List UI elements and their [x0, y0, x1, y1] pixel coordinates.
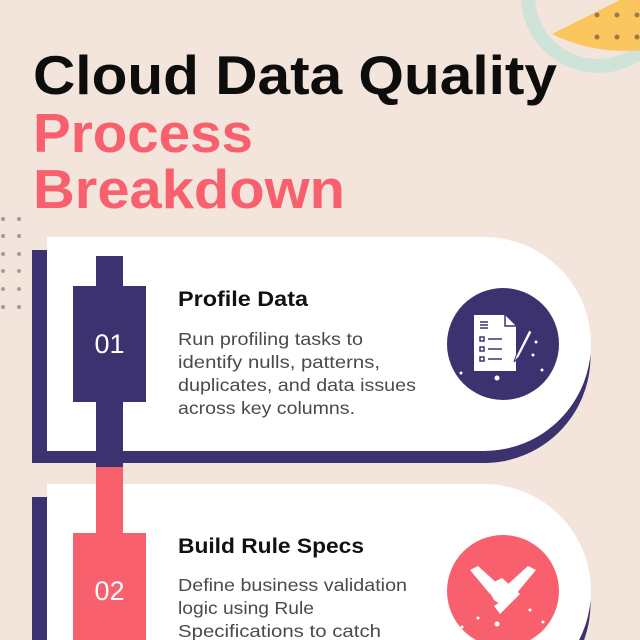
- title: Cloud Data Quality: [33, 44, 557, 106]
- icon: document checklist: [447, 288, 559, 400]
- panel: step 1 card: [32, 237, 591, 463]
- text: step 1 description: across key columns.: [178, 398, 355, 418]
- heading: Profile Data: Profile Data: [178, 288, 308, 311]
- text: step 2 description: logic using Rule: [178, 598, 314, 618]
- decoration: top-right ring: [528, 0, 640, 66]
- badge: 01: 01: [94, 329, 125, 359]
- heading: Build Rule Specs: Build Rule Specs: [178, 535, 364, 558]
- panel: step 2 card: [32, 484, 591, 640]
- text: step 1 description: duplicates, and data issues: [178, 375, 416, 395]
- title: Breakdown: [33, 158, 345, 220]
- icon: handshake: [447, 535, 559, 640]
- badge: 02: 02: [94, 576, 125, 606]
- text: step 1 description: Run profiling tasks to: [178, 329, 363, 349]
- badge: 02: [73, 533, 146, 640]
- title: [33, 44, 557, 220]
- decoration: dot grid: [1, 217, 21, 309]
- connector: timeline line: [96, 256, 123, 640]
- text: step 2 description: Define business validation: [178, 575, 407, 595]
- title: Process: [33, 102, 253, 164]
- text: step 1 description: identify nulls, patterns,: [178, 352, 380, 372]
- badge: 01: [73, 286, 146, 402]
